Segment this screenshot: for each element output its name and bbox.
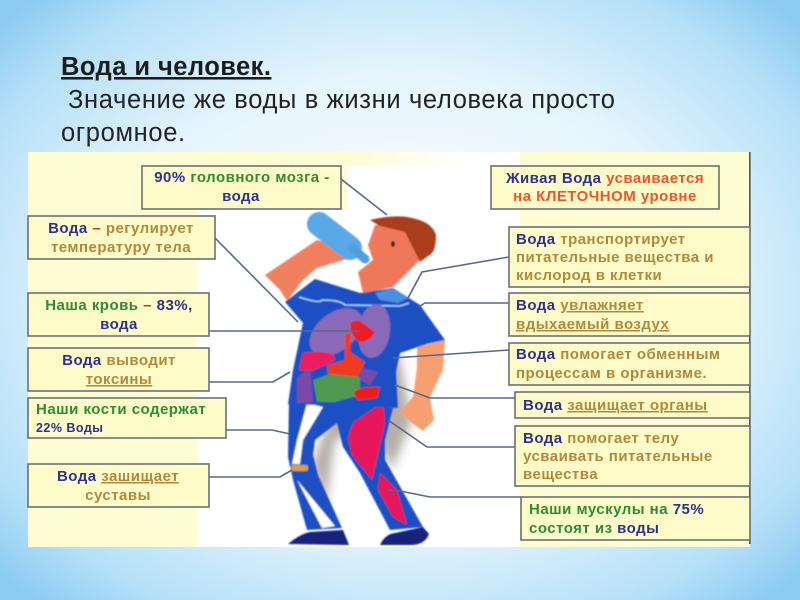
callout: blood: Наша кровь – 83%, (45, 297, 193, 314)
callout: toxins: токсины (86, 371, 152, 388)
callout: cellular level: на КЛЕТОЧНОМ уровне (513, 188, 697, 205)
far forearm (400, 340, 445, 431)
callout: toxins: Вода выводит (62, 352, 176, 369)
callout: metabolism: процессам в организме. (516, 365, 707, 382)
callout: joints (28, 464, 209, 507)
callout: organs: Вода защищает органы (523, 397, 708, 414)
eye (391, 241, 395, 247)
callout: muscles: Наши мускулы на 75% (529, 501, 704, 518)
illustration: man drinking water (265, 216, 445, 545)
water line on shirt (299, 297, 409, 306)
heart (350, 320, 375, 342)
callout: transport: питательные вещества и (516, 249, 714, 266)
calf muscle (378, 473, 407, 525)
callout: transport (509, 227, 750, 287)
connector lines (209, 179, 521, 497)
callout: temperature: температуру тела (51, 239, 191, 256)
kidney (353, 387, 380, 400)
collar (375, 288, 408, 303)
bones (292, 403, 335, 528)
callout: humidify: Вода увлажняет (516, 297, 644, 314)
callout: organs (515, 392, 750, 418)
callout: brain: 90% головного мозга - (154, 169, 330, 186)
neck and face (358, 225, 430, 293)
shoes (288, 527, 429, 545)
raised arm (265, 240, 350, 301)
callout: metabolism (509, 343, 750, 385)
title: Вода и человек. (61, 53, 271, 81)
callout: nutrients: усваивать питательные (523, 448, 713, 465)
callout: joints: Вода зашищает (57, 468, 179, 485)
callout: temperature: Вода – регулирует (48, 220, 194, 237)
hair (370, 216, 436, 262)
knee joint (291, 465, 308, 471)
callout: blood (28, 293, 209, 336)
shirt (285, 279, 445, 408)
callout: bones: Наши кости содержат (36, 401, 206, 418)
lungs (301, 299, 394, 365)
callout: metabolism: Вода помогает обменным (516, 346, 720, 363)
callout: cellular level (491, 166, 719, 209)
callout: nutrients: вещества (523, 466, 598, 483)
callout: bones: 22% Воды (36, 421, 103, 435)
callout: temperature (28, 216, 215, 259)
callout: nutrients: Вода помогает телу (523, 430, 679, 447)
stomach (327, 333, 365, 377)
panel: diagram background (28, 152, 751, 547)
liver (299, 352, 335, 371)
intro text: Значение же воды в жизни человека просто (68, 86, 616, 114)
callout: cellular level: Живая Вода усваивается (505, 170, 704, 187)
callout: muscles (521, 497, 750, 540)
legs (288, 400, 423, 530)
thigh muscle (348, 402, 385, 480)
callout: transport: Вода транспортирует (516, 231, 686, 248)
colon (297, 368, 378, 403)
callout: bones (28, 398, 226, 438)
callout: humidify: вдыхаемый воздух (516, 316, 670, 333)
body shadow (312, 350, 412, 510)
callout: joints: суставы (85, 487, 151, 504)
intro text: огромное. (61, 119, 186, 147)
callout: brain: вода (222, 188, 260, 205)
intestines (313, 374, 360, 402)
callout: blood: вода (100, 316, 138, 333)
bottle (319, 224, 365, 259)
callout: humidify (509, 293, 750, 336)
callout: transport: кислород в клетки (516, 267, 662, 284)
callout: muscles: состоят из воды (529, 520, 659, 537)
callout: nutrients (515, 426, 750, 486)
callout: brain (142, 166, 341, 209)
callout: toxins (28, 348, 209, 391)
